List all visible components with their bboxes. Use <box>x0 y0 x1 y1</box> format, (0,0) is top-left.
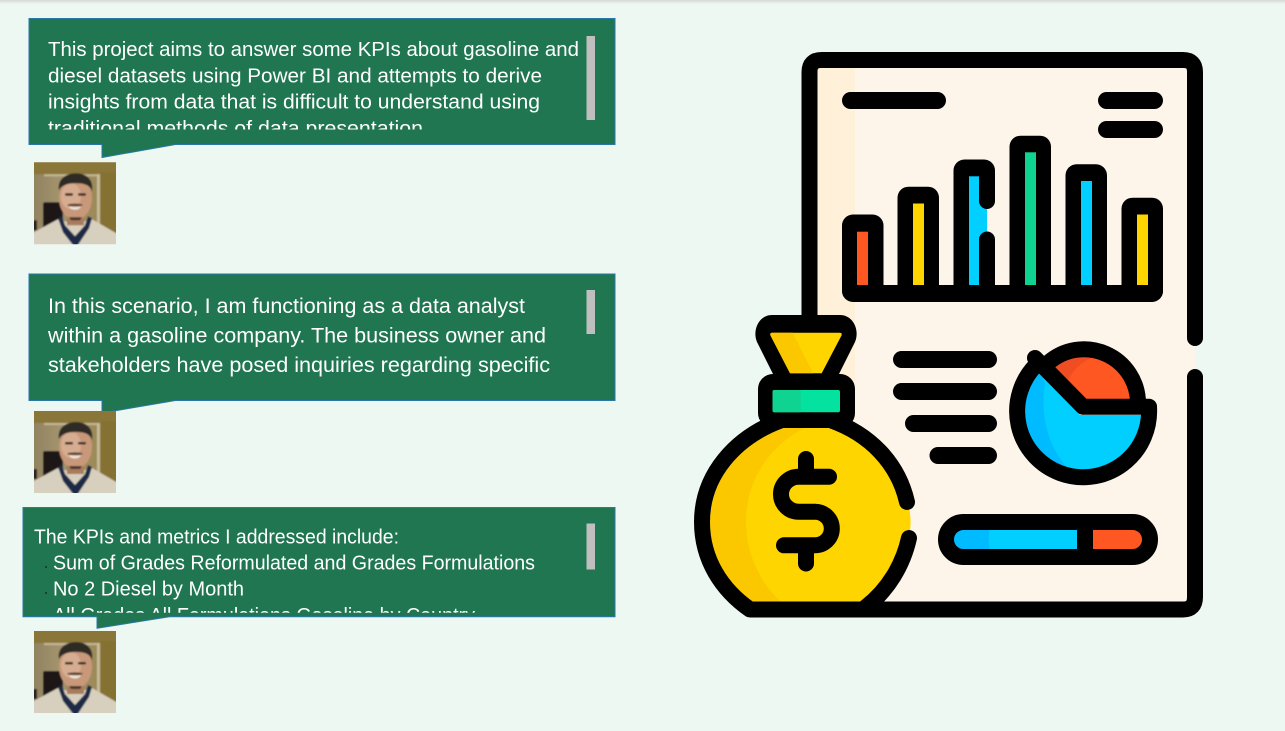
icon: report with money bag <box>702 60 1195 610</box>
text: KPI list: No 2 Diesel by Month <box>53 579 244 601</box>
text: scenario: In this scenario, I am functioning as a data analyst <box>48 294 525 318</box>
scrollbar <box>586 524 595 570</box>
report page <box>760 60 1195 610</box>
text: project aim: traditional methods of data presentation <box>48 117 423 140</box>
money bag <box>702 315 911 610</box>
text: project aim: diesel datasets using Power BI and attempts to derive <box>48 64 542 87</box>
text lines beside pie <box>893 351 997 464</box>
bag body <box>710 428 911 602</box>
text: KPI list: The KPIs and metrics I addressed include: <box>34 526 399 548</box>
avatar: first message <box>32 160 118 246</box>
text: KPI list: Sum of Grades Reformulated and Grades Formulations <box>53 552 535 574</box>
text: scenario <box>47 294 550 377</box>
panel: KPIs speech bubble <box>23 508 615 628</box>
bar chart <box>842 136 1163 302</box>
report header lines <box>842 92 1163 138</box>
scrollbar <box>586 36 595 120</box>
avatar: second message <box>32 409 118 495</box>
bag funnel top <box>755 315 857 376</box>
scrollbar <box>586 290 595 334</box>
dollar sign <box>781 459 832 564</box>
panel: scenario speech bubble <box>29 274 615 413</box>
text: scenario: stakeholders have posed inquiries regarding specific <box>48 353 550 377</box>
text: scenario: within a gasoline company. The business owner and <box>47 324 546 348</box>
progress bar <box>946 522 1150 557</box>
avatar: third message <box>32 629 118 715</box>
bag neck tie <box>758 374 855 428</box>
text: project aim <box>48 41 578 130</box>
pie chart <box>1017 349 1149 477</box>
text: KPI list <box>34 528 534 613</box>
text: project aim: This project aims to answer some KPIs about gasoline and <box>48 38 579 61</box>
panel: project aim speech bubble <box>29 18 615 158</box>
text: project aim: insights from data that is difficult to understand using <box>48 91 540 114</box>
text: KPI list: All Grades All Formulations Gasoline by Country <box>53 605 475 627</box>
